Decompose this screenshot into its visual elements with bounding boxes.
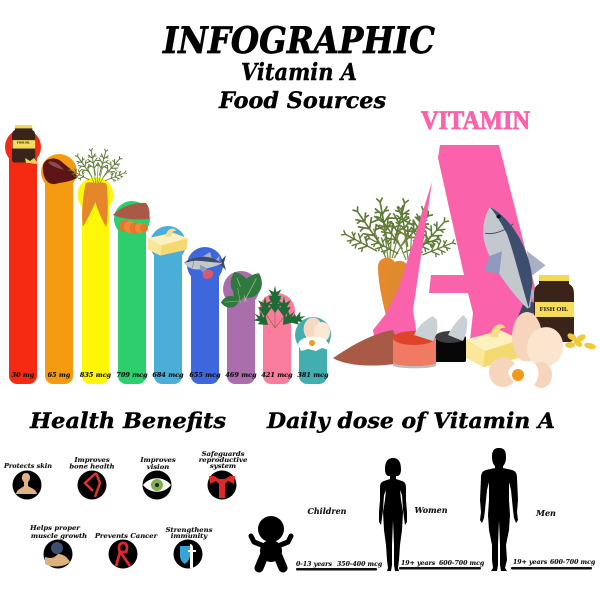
sweet potato [333, 330, 397, 366]
heading: Health Benefits: Health Benefits [29, 408, 226, 433]
label: Men [511, 508, 596, 570]
bar: butter: 684 mcg [152, 371, 184, 379]
label: Children [296, 506, 383, 570]
fish oil bottle: FISH OIL [540, 306, 569, 313]
bar: spinach [220, 269, 267, 384]
benefit: muscle growth: muscle growth [31, 532, 87, 540]
health benefits icons [3, 450, 248, 568]
silhouette: baby [251, 516, 291, 568]
label: Men: 19+ years [513, 559, 548, 566]
benefit: reproductive system: Safeguards [202, 450, 245, 458]
subtitle: Food Sources: Food Sources [218, 88, 386, 114]
bar: parsley: 421 mcg [261, 371, 293, 379]
benefit: immunity: Strengthens [166, 526, 213, 534]
benefit: reproductive system: system [210, 462, 236, 470]
label: Women [399, 505, 485, 570]
bar: fish oil: FISH OIL [17, 140, 30, 144]
benefit: muscle growth [29, 524, 87, 568]
benefit: reproductive system [199, 450, 248, 500]
benefit: vision [139, 456, 176, 500]
title: INFOGRAPHIC [162, 20, 435, 62]
butter [466, 324, 521, 367]
label: Children: Children [308, 506, 347, 516]
benefit: immunity [166, 526, 213, 568]
heading: VITAMIN: VITAMIN [421, 106, 530, 135]
bar: eggs [295, 317, 331, 384]
vitamin A illustration [333, 145, 597, 388]
bar: fish oil [5, 125, 41, 384]
label: Men: 600-700 mcg [550, 559, 596, 566]
bar: butter [148, 226, 188, 384]
fish oil bottle [534, 275, 574, 342]
benefit: bone health [69, 456, 115, 500]
heading: Daily dose of Vitamin A: Daily dose of Vitamin A [266, 408, 555, 433]
benefit: muscle growth: Helps proper [29, 524, 80, 532]
bar: liver: 65 mg [48, 371, 71, 379]
tuna [464, 196, 562, 329]
eggs [489, 312, 568, 388]
benefit: vision: vision [147, 463, 169, 471]
label: Men: Men [535, 508, 556, 518]
benefit: reproductive system: reproductive [199, 456, 248, 464]
carrots behind the letter [339, 196, 458, 320]
red can [393, 316, 437, 368]
benefit: vision: Improves [139, 456, 176, 464]
bar: tuna: 655 mcg [189, 371, 221, 379]
bar: carrot [67, 148, 128, 384]
benefit: bone health: bone health [69, 462, 115, 470]
subtitle: Vitamin A: Vitamin A [241, 59, 357, 86]
bar: parsley [250, 286, 308, 384]
bar chart: food sources [5, 125, 331, 384]
black can [435, 315, 467, 362]
daily dose section [251, 448, 596, 571]
label: Children: 350-400 mcg [337, 561, 383, 568]
benefit: immunity: immunity [171, 532, 208, 540]
capsules [565, 332, 597, 350]
silhouette: woman [379, 458, 407, 571]
benefit: bone health: Improves [73, 456, 110, 464]
bar: sweet potato [113, 201, 150, 384]
benefit: protects skin: Protects skin [3, 462, 52, 470]
benefit: prevents cancer: Prevents Cancer [94, 532, 158, 540]
bar: liver [41, 154, 78, 384]
bar: sweet potato: 709 mcg [116, 371, 148, 379]
label: Children: 0-13 years [296, 561, 332, 568]
letter A [373, 145, 547, 342]
silhouette: man [480, 448, 518, 571]
bar: eggs: 381 mcg [297, 371, 329, 379]
label: Women: 600-700 mcg [439, 560, 485, 567]
bar: spinach: 469 mcg [225, 371, 257, 379]
bar: carrot: 835 mcg [80, 371, 112, 379]
label: Women: 19+ years [401, 560, 436, 567]
bar: tuna [184, 247, 226, 384]
benefit: prevents cancer [94, 532, 158, 568]
bar: fish oil: 30 mg [12, 371, 35, 379]
label: Women: Women [414, 505, 448, 515]
benefit: protects skin [3, 462, 52, 500]
